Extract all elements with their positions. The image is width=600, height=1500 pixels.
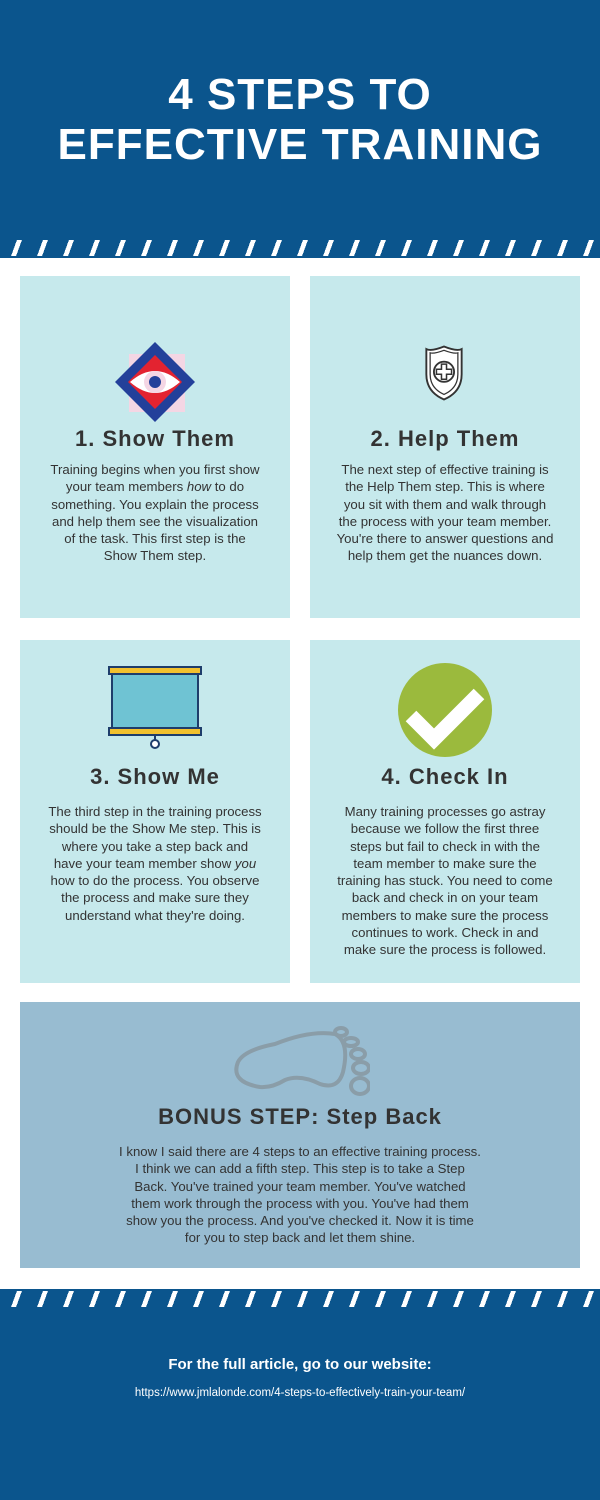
title: EFFECTIVE TRAINING [58, 120, 542, 169]
icon: footprint [234, 1026, 370, 1096]
icon: eye diamond [115, 342, 195, 422]
icon: check [398, 663, 492, 757]
icon: projector screen [108, 666, 202, 749]
heading: BONUS STEP: Step Back [158, 1104, 442, 1129]
header [0, 0, 600, 258]
panel: bonus [20, 1002, 580, 1268]
panel: help them [310, 276, 580, 618]
icon: shield [425, 346, 463, 400]
heading: 4. Check In [381, 764, 509, 789]
footer heading: For the full article, go to our website: [168, 1356, 432, 1373]
panel: show them [20, 276, 290, 618]
text: The next step of effective training is the Help Them step. This is where you sit with them and walk through the process with your team member. You're there to answer questions and help them get the nuances down. [337, 462, 553, 563]
footer [0, 1289, 600, 1500]
heading: 1. Show Them [75, 426, 235, 451]
text: The third step in the training process should be the Show Me step. This is where you take a step back and have your team member show you how to do the process. You observe the process and make sure they understand what they're doing. [48, 804, 262, 923]
panel: check in [310, 640, 580, 983]
title: 4 STEPS TO [168, 70, 432, 119]
heading: 2. Help Them [371, 426, 519, 451]
url: https://www.jmlalonde.com/4-steps-to-effectively-train-your-team/ [135, 1387, 465, 1399]
panel: show me [20, 640, 290, 983]
text: I know I said there are 4 steps to an effective training process. I think we can add a fifth step. This step is to take a Step Back. You've trained your team member. You've watched them work through the process with you. You've had them show you the process. And you've checked it. Now it is time for you to step back and let them shine. [119, 1144, 481, 1245]
text: Many training processes go astray because we follow the first three steps but fail to check in with the team member to make sure the training has stuck. You need to come back and check in on your team members to make sure the process continues to work. Check in and make sure the process is followed. [337, 804, 553, 957]
title [58, 70, 542, 169]
text: Training begins when you first show your team members how to do something. You explain the process and help them see the visualization of the task. This first step is the Show Them step. [50, 462, 260, 563]
heading: 3. Show Me [90, 764, 220, 789]
